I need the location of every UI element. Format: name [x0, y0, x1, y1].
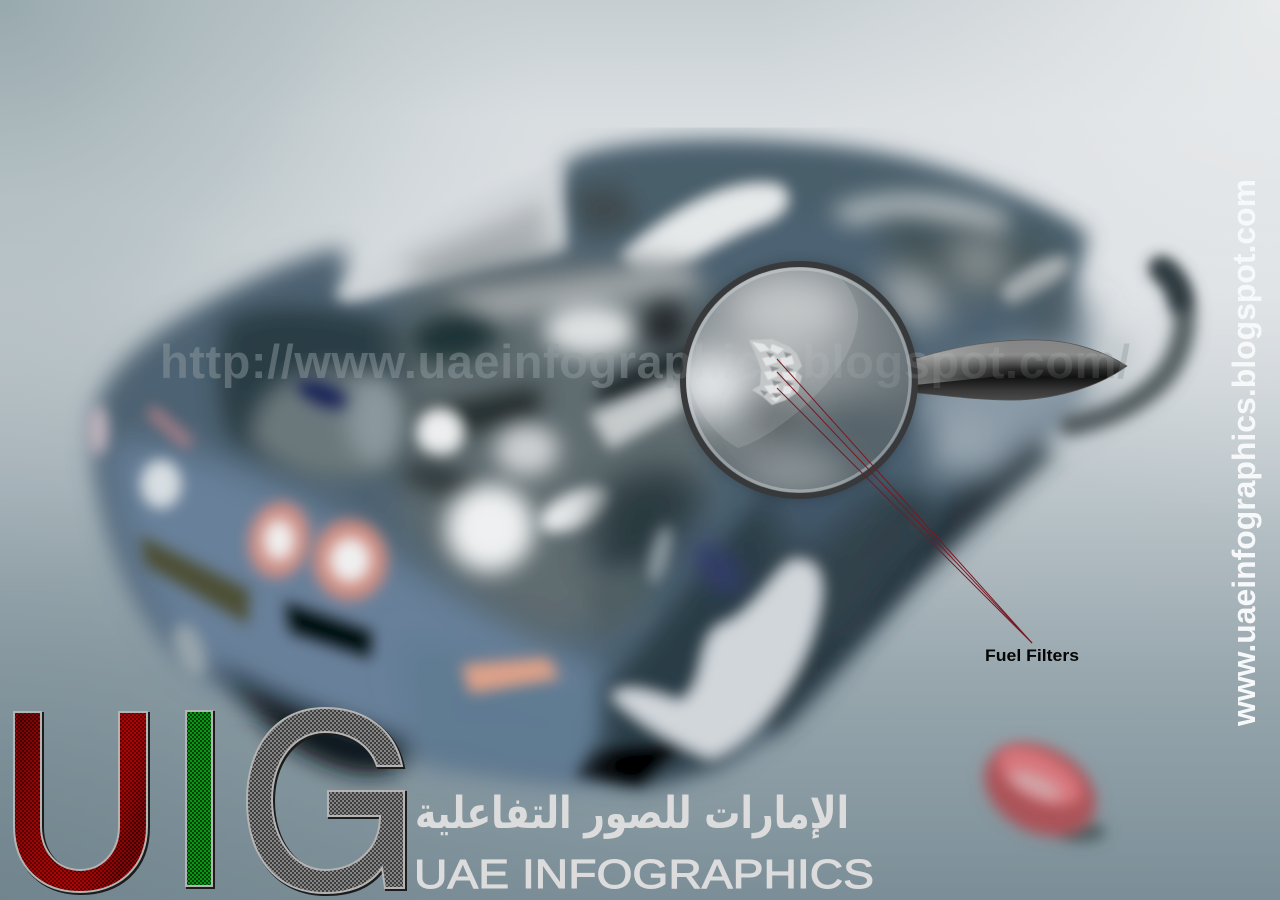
- roof light bar: [620, 183, 788, 285]
- label: Fuel Filters: Fuel Filters: [985, 647, 1079, 665]
- wheel arch shadow: [218, 307, 440, 470]
- lower-centre body blue: [400, 640, 600, 770]
- red badge: [968, 725, 1112, 855]
- arabic tagline: الإمارات للصور التفاعلية: [415, 788, 849, 839]
- leader lines to label: [777, 359, 1032, 643]
- white front lower panel: [610, 559, 823, 760]
- black vent: [285, 602, 372, 658]
- brand name: UAE INFOGRAPHICS: [414, 851, 874, 897]
- magnifying glass lens: [160, 260, 1130, 500]
- yellow plate: [140, 535, 250, 625]
- rear dark and blue side: [900, 300, 1100, 480]
- cabin dark: [570, 150, 1085, 300]
- rear spoiler arc: [1070, 270, 1185, 425]
- rear cabin panels: [830, 194, 1010, 250]
- bottom shadow: [760, 440, 1040, 720]
- letter U: [14, 712, 148, 894]
- fuel filter detail: [749, 339, 802, 405]
- windscreen: [335, 165, 565, 300]
- front panel: [110, 440, 610, 780]
- watermark seen through lens: http://www.uaeinfographics.blogspot.com/: [160, 335, 1130, 388]
- magnifying glass handle: [915, 340, 1127, 400]
- letter G: [247, 708, 406, 894]
- blurred wheel: [250, 368, 400, 480]
- logo: UIG: [14, 708, 406, 894]
- car: blurred illustration: [88, 141, 1185, 785]
- side indicators: [88, 405, 108, 455]
- car body silhouette: [92, 141, 1085, 785]
- lower-left vent: [167, 619, 213, 681]
- red headlights: [242, 497, 316, 583]
- lens gloss: [686, 264, 858, 448]
- watermark url: http://www.uaeinfographics.blogspot.com/: [160, 335, 1130, 388]
- orange light: [462, 658, 560, 693]
- lens inner tones: [672, 280, 920, 490]
- engine bay: [397, 259, 720, 640]
- letter I: [186, 711, 214, 888]
- blue highlight near front wheel: [685, 534, 751, 602]
- vertical site url: www.uaeinfographics.blogspot.com: [1226, 179, 1262, 727]
